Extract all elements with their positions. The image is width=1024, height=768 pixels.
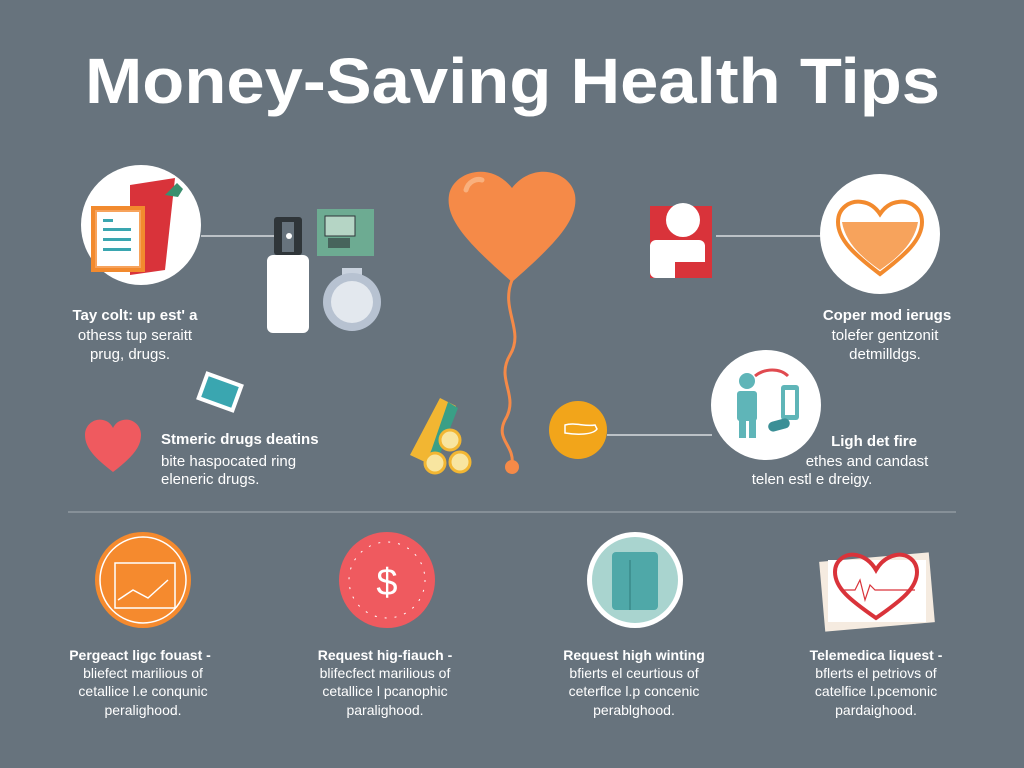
bottom tip 3: bfierts el ceurtious of [569, 665, 699, 681]
text: tip 2: detmilldgs. [849, 346, 921, 363]
icon: tilted card [196, 371, 244, 413]
text: tip 1: Tay colt: up est' a [73, 307, 198, 324]
text: tip 2: Coper mod ierugs [823, 307, 951, 324]
bottom tip 3: ceterflce l.p concenic [569, 683, 699, 699]
bottom tip 2: blifecfect marilious of [320, 665, 450, 681]
text: tip 4: telen estl e dreigy. [752, 471, 872, 488]
bottom tip 4 [810, 552, 943, 718]
text: tip 1 [73, 307, 198, 363]
icon: red heart [85, 420, 141, 472]
icon: document circle [81, 165, 201, 285]
icon: heart balloon [449, 172, 575, 474]
text: tip 3: eleneric drugs. [161, 471, 259, 488]
bottom tip 1 [69, 532, 211, 718]
bottom tip 3: perablghood. [593, 702, 675, 718]
bottom tip 1: bliefect marilious of [83, 665, 203, 681]
icon: monitor card [317, 209, 374, 256]
bottom tip 1: cetallice l.e conqunic [78, 683, 208, 699]
bottom tip 2 [318, 532, 453, 718]
text: tip 3: Stmeric drugs deatins [161, 431, 319, 448]
bottom tip 2: Request hig-fiauch - [318, 647, 453, 663]
text: tip 4: ethes and candast [806, 453, 929, 470]
title: Money-Saving Health Tips [85, 45, 940, 117]
icon: bottle [267, 217, 309, 333]
bottom tip 3: Request high winting [563, 647, 705, 663]
bottom tip 4: catelfice l.pcemonic [815, 683, 937, 699]
text: tip 1: othess tup seraitt [78, 327, 193, 344]
icon: person red [650, 203, 712, 278]
bottom tip 2: paralighood. [346, 702, 424, 718]
icon: heart grid circle [820, 174, 940, 294]
text: tip 3 [161, 431, 319, 488]
bottom tip 4: bflerts el petriovs of [815, 665, 937, 681]
text: tip 4 [752, 433, 929, 488]
bottom tip 2: $ [376, 562, 398, 604]
bottom tip 4: pardaighood. [835, 702, 917, 718]
bottom tip 1: peralighood. [104, 702, 182, 718]
bottom tip 1: Pergeact ligc fouast - [69, 647, 211, 663]
text: tip 1: prug, drugs. [90, 346, 170, 363]
text: tip 2 [823, 307, 951, 363]
text: tip 3: bite haspocated ring [161, 453, 296, 470]
icon: yellow circle [549, 401, 607, 459]
icon: person bottle circle [711, 350, 821, 460]
text: tip 4: Ligh det fire [831, 433, 917, 450]
bottom tip 3 [563, 532, 705, 718]
bottom tip 4: Telemedica liquest - [810, 647, 943, 663]
icon: stopwatch [323, 268, 381, 331]
text: tip 2: tolefer gentzonit [832, 327, 939, 344]
bottom tip 2: cetallice l pcanophic [322, 683, 448, 699]
icon: pencil coins [410, 398, 470, 473]
